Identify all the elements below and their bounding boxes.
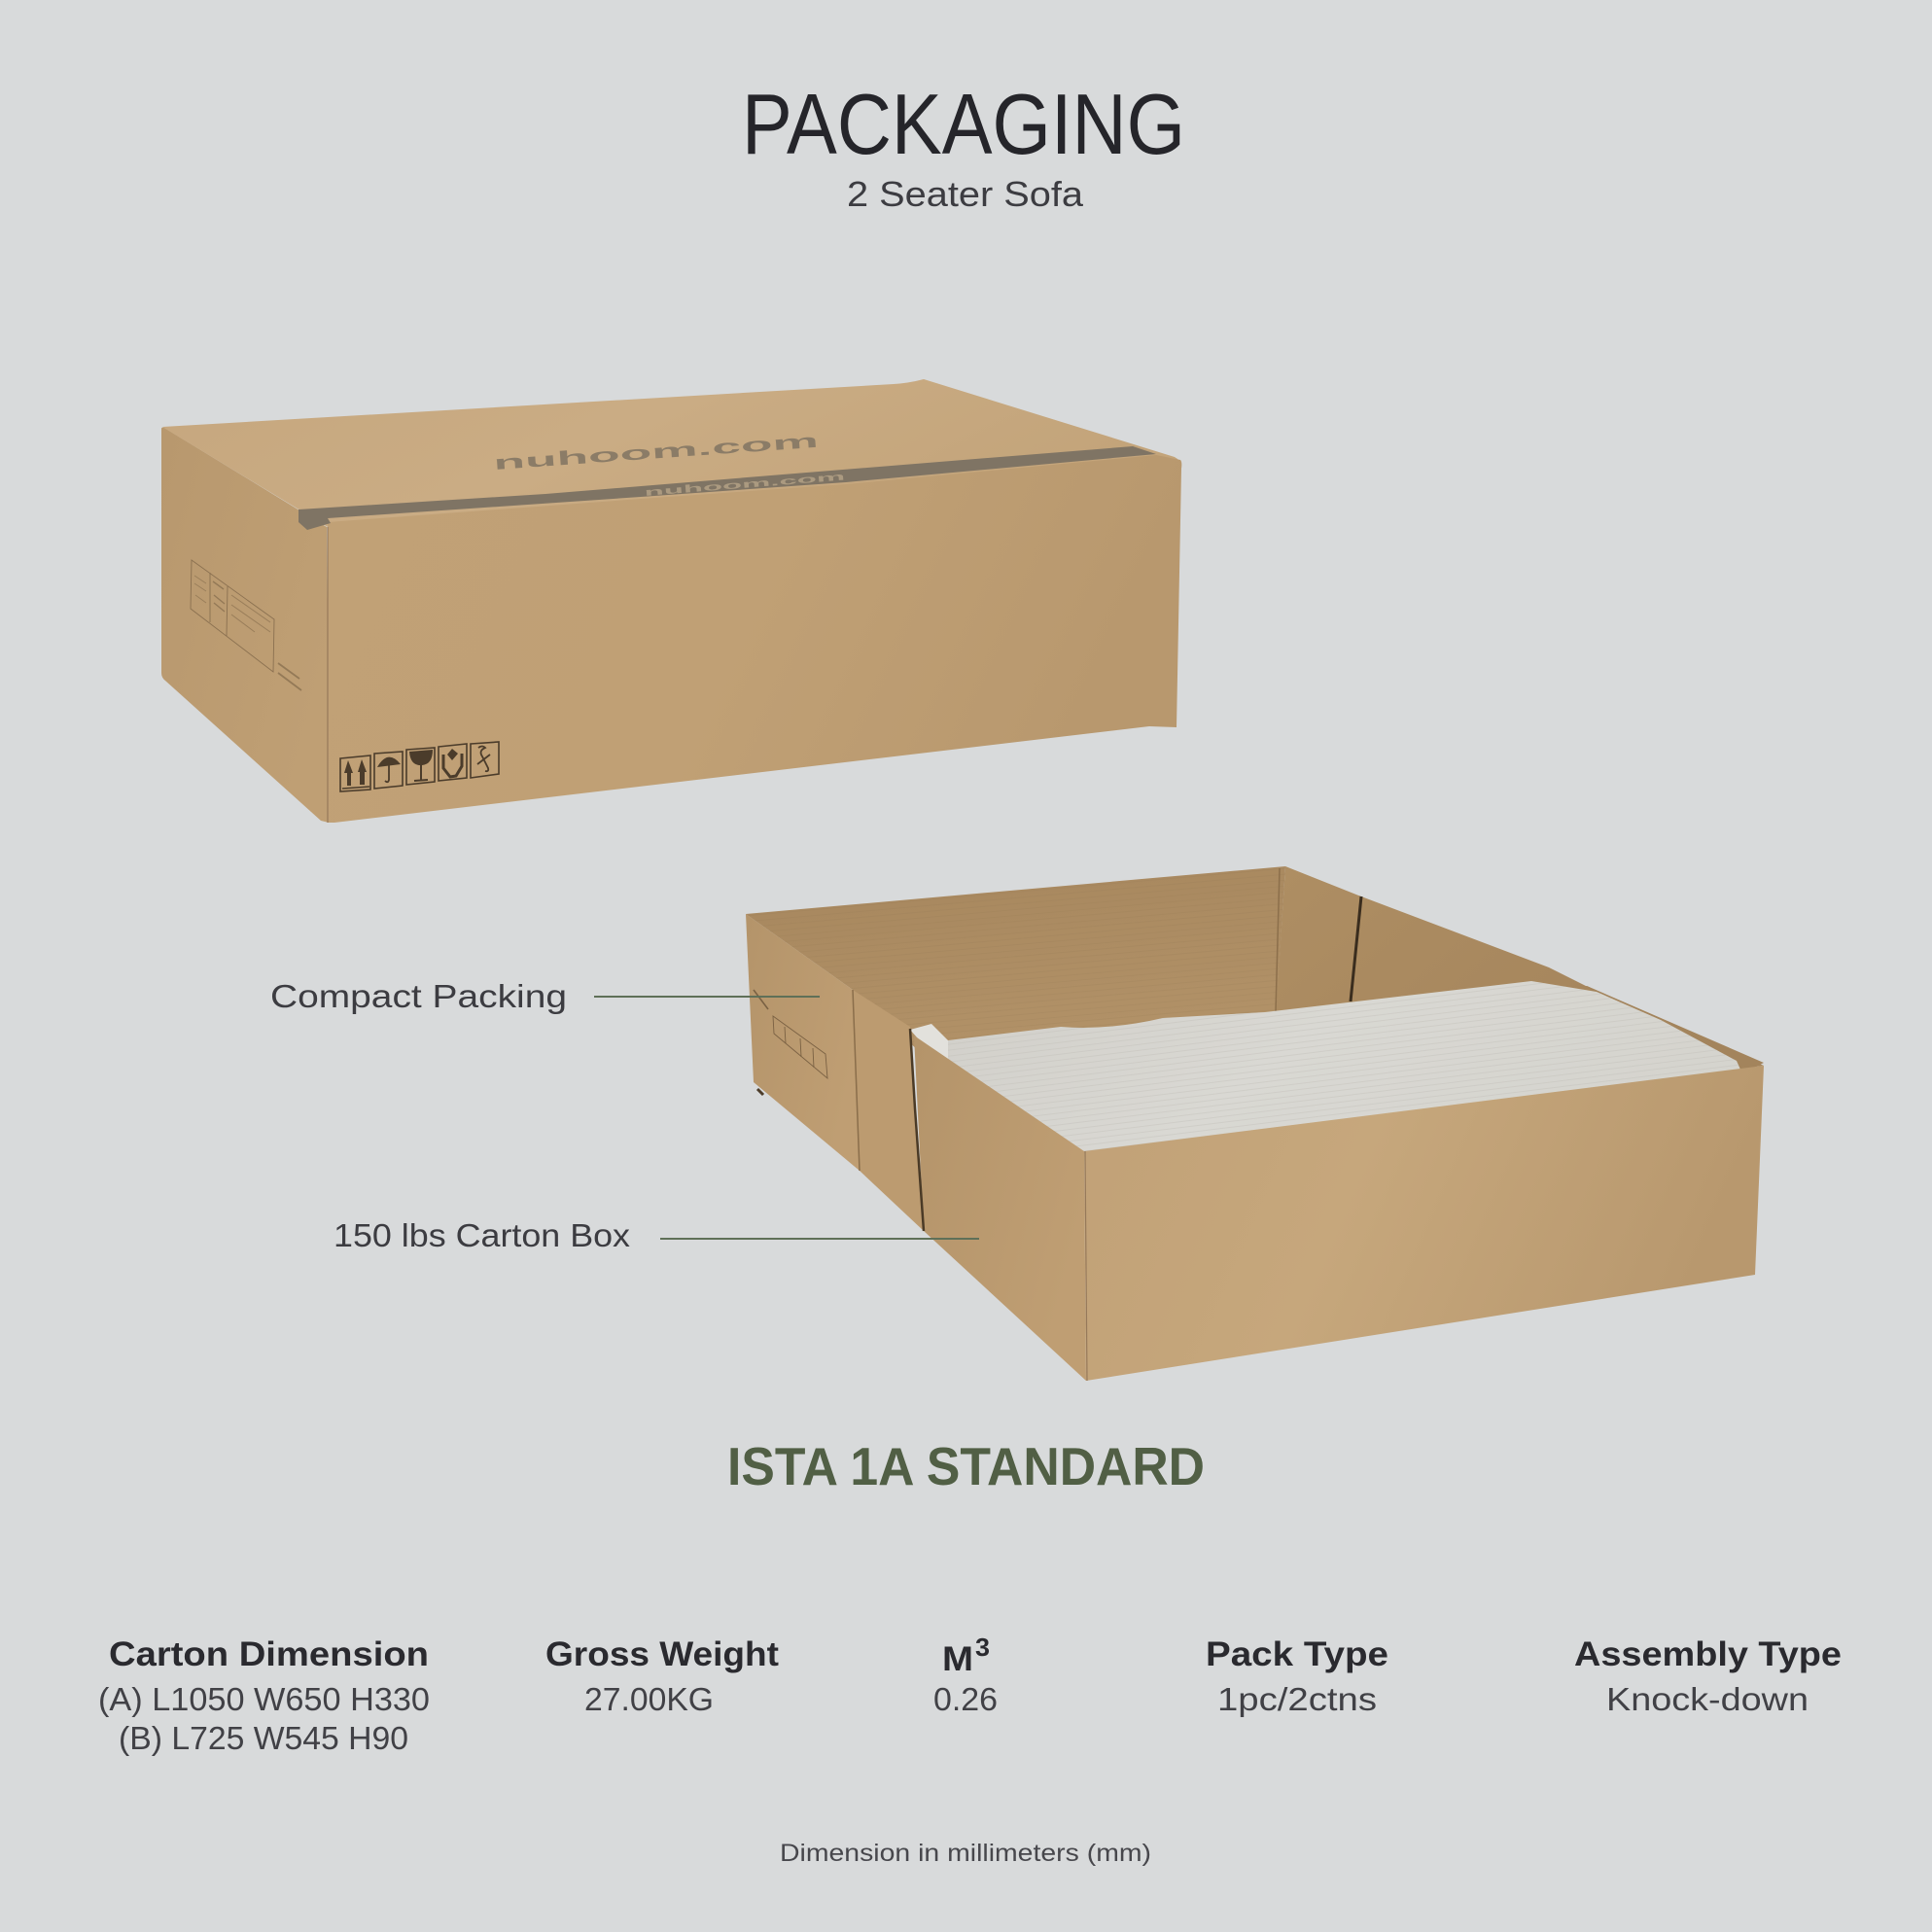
box front face [328, 455, 1181, 823]
spec heading: Assembly Type [1574, 1635, 1842, 1673]
left outer wall, rear panel [746, 914, 860, 1171]
front-left wall [914, 1036, 1086, 1381]
closed carton box [161, 379, 1181, 823]
spec heading: Carton Dimension [109, 1635, 429, 1673]
spec heading: Gross Weight [545, 1635, 779, 1673]
inner right wall [1276, 866, 1653, 1031]
far right inner strip [1587, 986, 1764, 1074]
icon: this way up [340, 755, 370, 791]
heading: ISTA 1A STANDARD: ISTA 1A STANDARD [727, 1436, 1205, 1496]
spec heading M: M [942, 1640, 973, 1678]
product label on side [191, 560, 301, 690]
pack value: 1pc/2ctns [1217, 1681, 1377, 1717]
logo on box top: nuhoom.com [493, 431, 820, 474]
dark gap between flaps [910, 1029, 924, 1231]
logo on tape: nuhoom.com [644, 471, 846, 499]
front wall [1084, 1066, 1764, 1381]
callout label: 150 lbs Carton Box [334, 1217, 631, 1253]
spec heading: Pack Type [1206, 1635, 1388, 1673]
foam wrapped sofa parts [910, 981, 1740, 1157]
spec: cubic metres [933, 1633, 998, 1717]
dark seam of inner wall [1351, 896, 1361, 1001]
box interior floor [910, 986, 1764, 1151]
icon: handle with care [439, 744, 467, 781]
printed label on side wall [754, 990, 827, 1095]
footnote: Dimension in millimeters (mm) [780, 1840, 1151, 1867]
leader line [660, 1238, 979, 1240]
subtitle: 2 Seater Sofa: 2 Seater Sofa [847, 174, 1084, 214]
weight value: 27.00KG [584, 1681, 714, 1717]
handling icons [340, 742, 499, 791]
leader line [594, 996, 820, 998]
spec: gross weight [545, 1635, 779, 1717]
spec: pack type [1206, 1635, 1388, 1717]
left outer wall, middle panel [853, 990, 924, 1231]
box top face [162, 379, 1181, 527]
icon: sling symbol [471, 742, 499, 778]
icon: keep dry umbrella [374, 752, 403, 789]
callout label: Compact Packing [270, 978, 567, 1014]
carton B dimensions: (B) L725 W545 H90 [119, 1720, 408, 1756]
spec: carton dimension [98, 1635, 430, 1756]
carton A dimensions: (A) L1050 W650 H330 [98, 1681, 430, 1717]
volume value: 0.26 [933, 1681, 998, 1717]
superscript 3: 3 [975, 1633, 990, 1662]
box left side face [161, 428, 329, 823]
icon: fragile glass [406, 748, 435, 785]
packing tape [299, 446, 1156, 530]
inner rear wall [746, 866, 1285, 1065]
title: PACKAGING: PACKAGING [742, 76, 1185, 172]
open carton box with foam-wrapped contents [746, 866, 1764, 1381]
assembly value: Knock-down [1606, 1681, 1809, 1717]
spec: assembly type [1574, 1635, 1842, 1717]
